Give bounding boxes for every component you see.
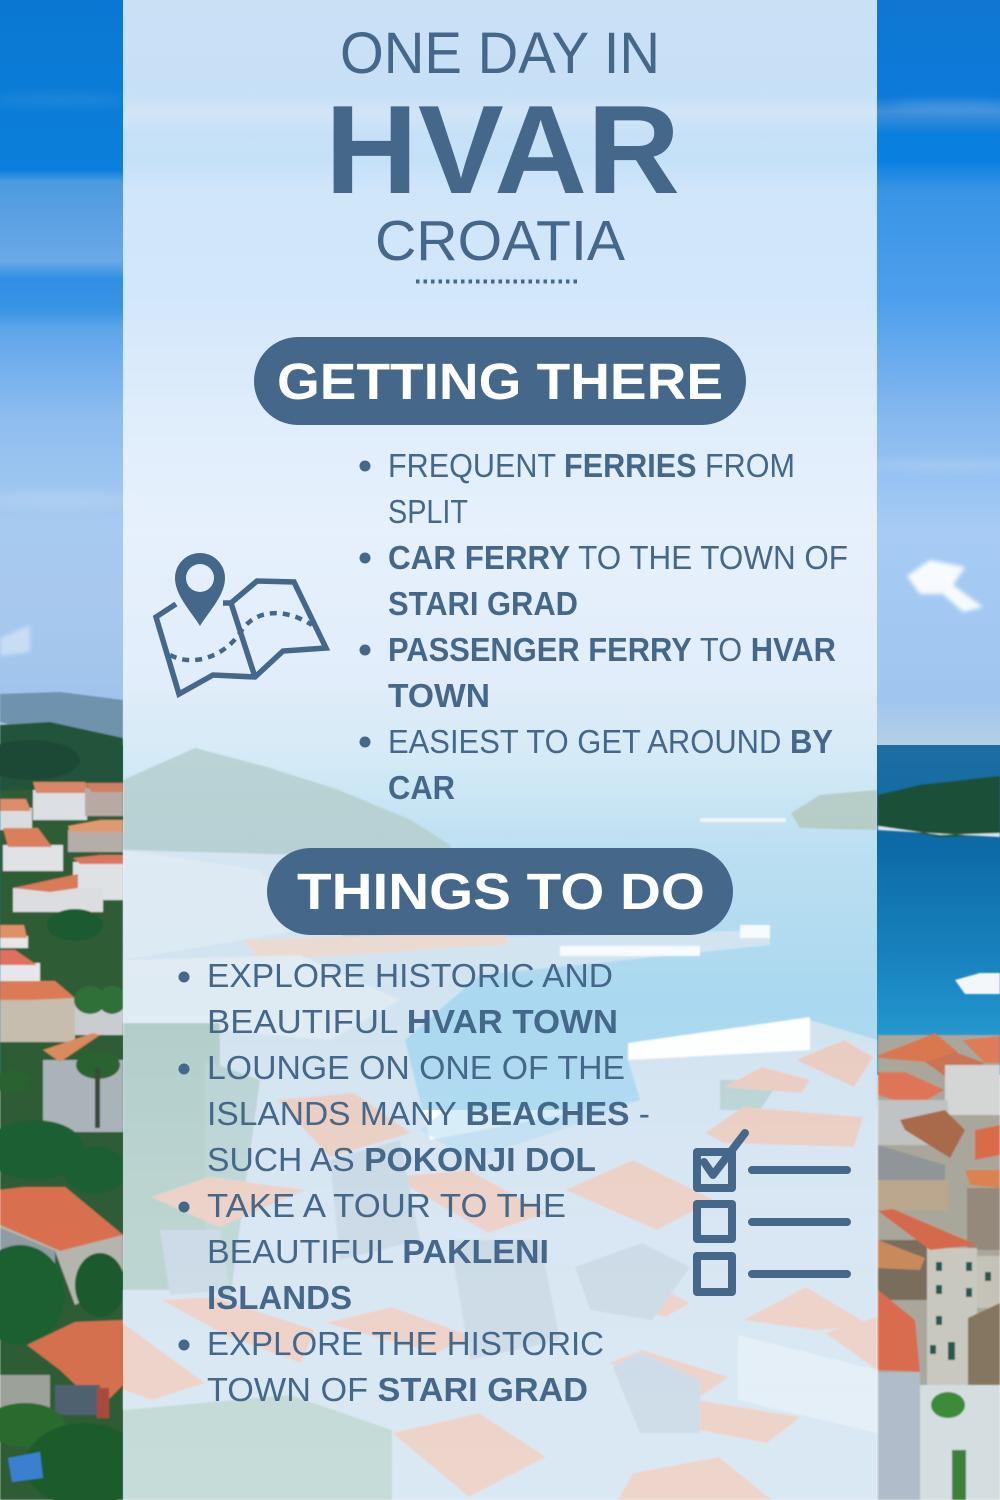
list: things to do: LOUNGE ON ONE OF THE [207, 1049, 625, 1086]
list: things to do: ISLANDS [207, 1279, 352, 1316]
list: getting there tips: PASSENGER FERRY TO HVAR [388, 631, 836, 668]
list: getting there tips: FREQUENT FERRIES FROM [388, 447, 795, 484]
heading pill: things to do: THINGS TO DO [297, 863, 705, 920]
sea [0, 690, 1000, 1110]
list: getting there tips: STARI GRAD [388, 585, 578, 622]
list: things to do: ISLANDS MANY BEACHES - [207, 1095, 650, 1132]
right harbour-side houses [878, 973, 1000, 1500]
list: getting there tips: EASIEST TO GET AROUND BY [388, 723, 833, 760]
list: things to do: BEAUTIFUL HVAR TOWN [207, 1003, 618, 1040]
list: things to do: TAKE A TOUR TO THE [207, 1187, 566, 1224]
translucent centre panel [123, 0, 877, 1500]
heading pill: things to do [267, 848, 733, 935]
list: things to do: EXPLORE THE HISTORIC [207, 1325, 604, 1362]
list: getting there tips: SPLIT [388, 493, 468, 530]
icon: checklist [697, 1133, 847, 1292]
far mountains and wooded hills [0, 692, 1000, 1500]
heading pill: getting there: GETTING THERE [277, 353, 723, 410]
title line: Croatia: CROATIA [375, 209, 625, 273]
list: things to do: TOWN OF STARI GRAD [207, 1371, 588, 1408]
town beneath the panel [123, 850, 877, 1500]
left hillside houses and trees [0, 740, 145, 1500]
sky with clouds [0, 0, 1000, 750]
list: things to do [178, 957, 650, 1408]
list: things to do: EXPLORE HISTORIC AND [207, 957, 613, 994]
title line: Hvar: HVAR [325, 79, 680, 220]
list: things to do: BEAUTIFUL PAKLENI [207, 1233, 549, 1270]
list: getting there tips [360, 447, 848, 806]
title line: one day in: ONE DAY IN [340, 21, 660, 86]
icon: map with location pin [156, 553, 326, 694]
title [325, 21, 680, 273]
list: getting there tips: CAR FERRY TO THE TOWN OF [388, 539, 848, 576]
list: getting there tips: CAR [388, 769, 455, 806]
list: things to do: SUCH AS POKONJI DOL [207, 1141, 596, 1178]
heading pill: getting there [254, 337, 746, 425]
list: getting there tips: TOWN [388, 677, 490, 714]
